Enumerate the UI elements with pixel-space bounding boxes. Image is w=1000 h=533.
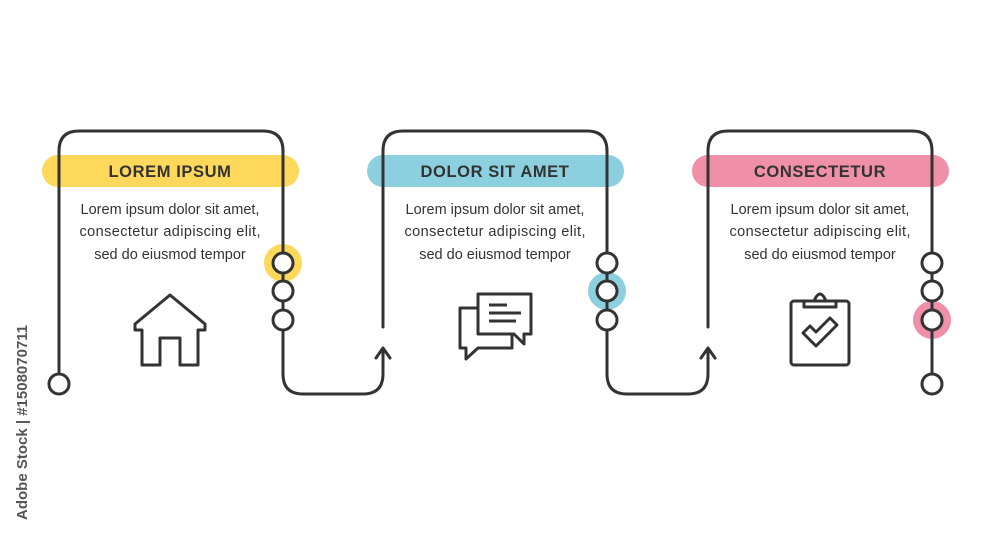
highlight dots (264, 244, 951, 339)
icon: chat (460, 294, 531, 359)
text: step 2: Lorem ipsum dolor sit amet, (406, 202, 584, 218)
pill: dolor sit amet (367, 155, 624, 187)
text: step 2 (404, 202, 586, 263)
text: step 2: consectetur adipiscing elit, (404, 224, 586, 240)
step circles (49, 253, 942, 394)
pill: lorem ipsum (42, 155, 299, 187)
text: step 3: consectetur adipiscing elit, (730, 224, 910, 240)
pill: dolor sit amet: DOLOR SIT AMET (421, 163, 569, 181)
text: step 2: sed do eiusmod tempor (419, 247, 571, 263)
text: step 1 (80, 202, 260, 263)
pill: lorem ipsum: LOREM IPSUM (108, 163, 232, 181)
text: step 3: sed do eiusmod tempor (744, 247, 896, 263)
path line (59, 131, 932, 394)
pill: consectetur (692, 155, 949, 187)
text: step 1: sed do eiusmod tempor (94, 247, 246, 263)
icon: house (135, 295, 205, 365)
text: step 1: consectetur adipiscing elit, (80, 224, 260, 240)
icon: clipboard (791, 294, 849, 365)
watermark id: Adobe Stock | #1508070711 (14, 325, 31, 520)
text: step 1: Lorem ipsum dolor sit amet, (81, 202, 259, 218)
text: step 3: Lorem ipsum dolor sit amet, (731, 202, 909, 218)
text: step 3 (730, 202, 910, 263)
pill: consectetur: CONSECTETUR (754, 163, 886, 181)
